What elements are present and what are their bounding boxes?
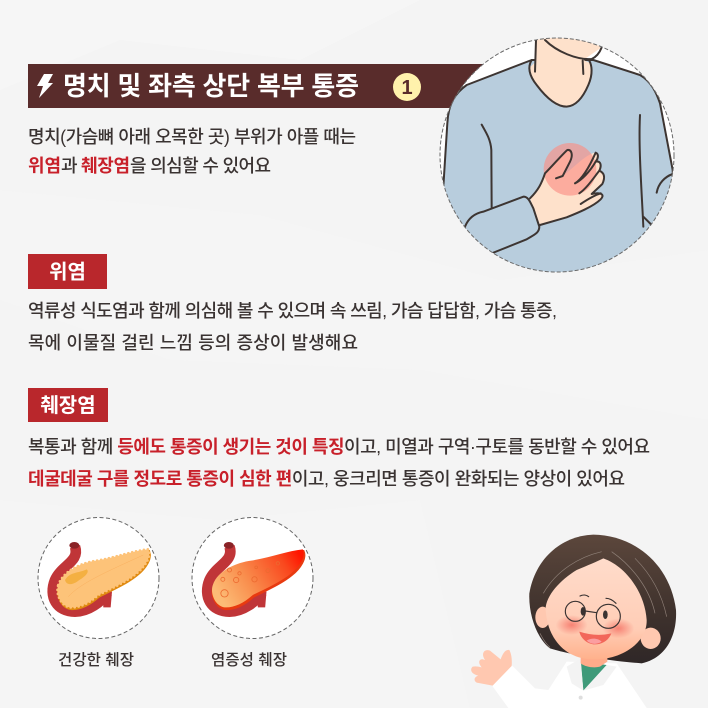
intro text: 명치(가슴뼈 아래 오목한 곳) 부위가 아플 때는: [28, 127, 356, 147]
illustration: hand on chest: [437, 30, 677, 283]
illustration: healthy pancreas: [38, 518, 159, 638]
intro text: 을 의심할 수 있어요: [130, 156, 271, 176]
label: healthy pancreas: 건강한 췌장: [58, 651, 134, 669]
intro text: 위염: [28, 156, 61, 176]
text block: 췌장염: [28, 437, 650, 489]
number badge: [393, 73, 421, 101]
label: inflamed pancreas: 염증성 췌장: [211, 651, 287, 669]
title: 명치 및 좌측 상단 복부 통증: [63, 71, 359, 101]
text block: 위염: 역류성 식도염과 함께 의심해 볼 수 있으며 속 쓰림, 가슴 답답함, 가슴 통증,: [28, 301, 557, 321]
text block: 췌장염: 복통과 함께 등에도 통증이 생기는 것이 특징이고, 미열과 구역·구토를 동반할 수 있어요: [28, 437, 650, 457]
glasses and eyes: [565, 595, 620, 628]
hair strands: [540, 552, 667, 647]
coat: [492, 662, 647, 708]
intro text: [28, 127, 356, 176]
illustration: inflamed pancreas: [192, 518, 313, 638]
section heading: 위염: [28, 254, 107, 289]
cheeks: [556, 615, 588, 635]
section heading: 췌장염: [28, 388, 108, 422]
ears: [535, 607, 550, 628]
text block: 위염: [28, 301, 557, 353]
text block: 위염: 목에 이물질 걸린 느낌 등의 증상이 발생해요: [28, 333, 358, 353]
face: [546, 558, 647, 659]
section heading: 췌장염: 췌장염: [40, 394, 96, 417]
number badge: 1: [401, 77, 413, 99]
section heading: 위염: 위염: [49, 260, 86, 284]
intro text: 췌장염: [81, 156, 130, 176]
intro text: 과: [61, 156, 78, 176]
icon: lightning bolt: [37, 74, 53, 98]
title bar: [28, 64, 488, 108]
text block: 췌장염: 데굴데굴 구를 정도로 통증이 심한 편이고, 웅크리면 통증이 완화되는 양상이 있어요: [28, 469, 625, 489]
collar and shirt: [581, 662, 607, 691]
doctor character: [471, 535, 676, 708]
hand: [471, 650, 512, 686]
mouth: [579, 632, 611, 644]
neck: [581, 655, 607, 667]
hair: [529, 535, 676, 663]
